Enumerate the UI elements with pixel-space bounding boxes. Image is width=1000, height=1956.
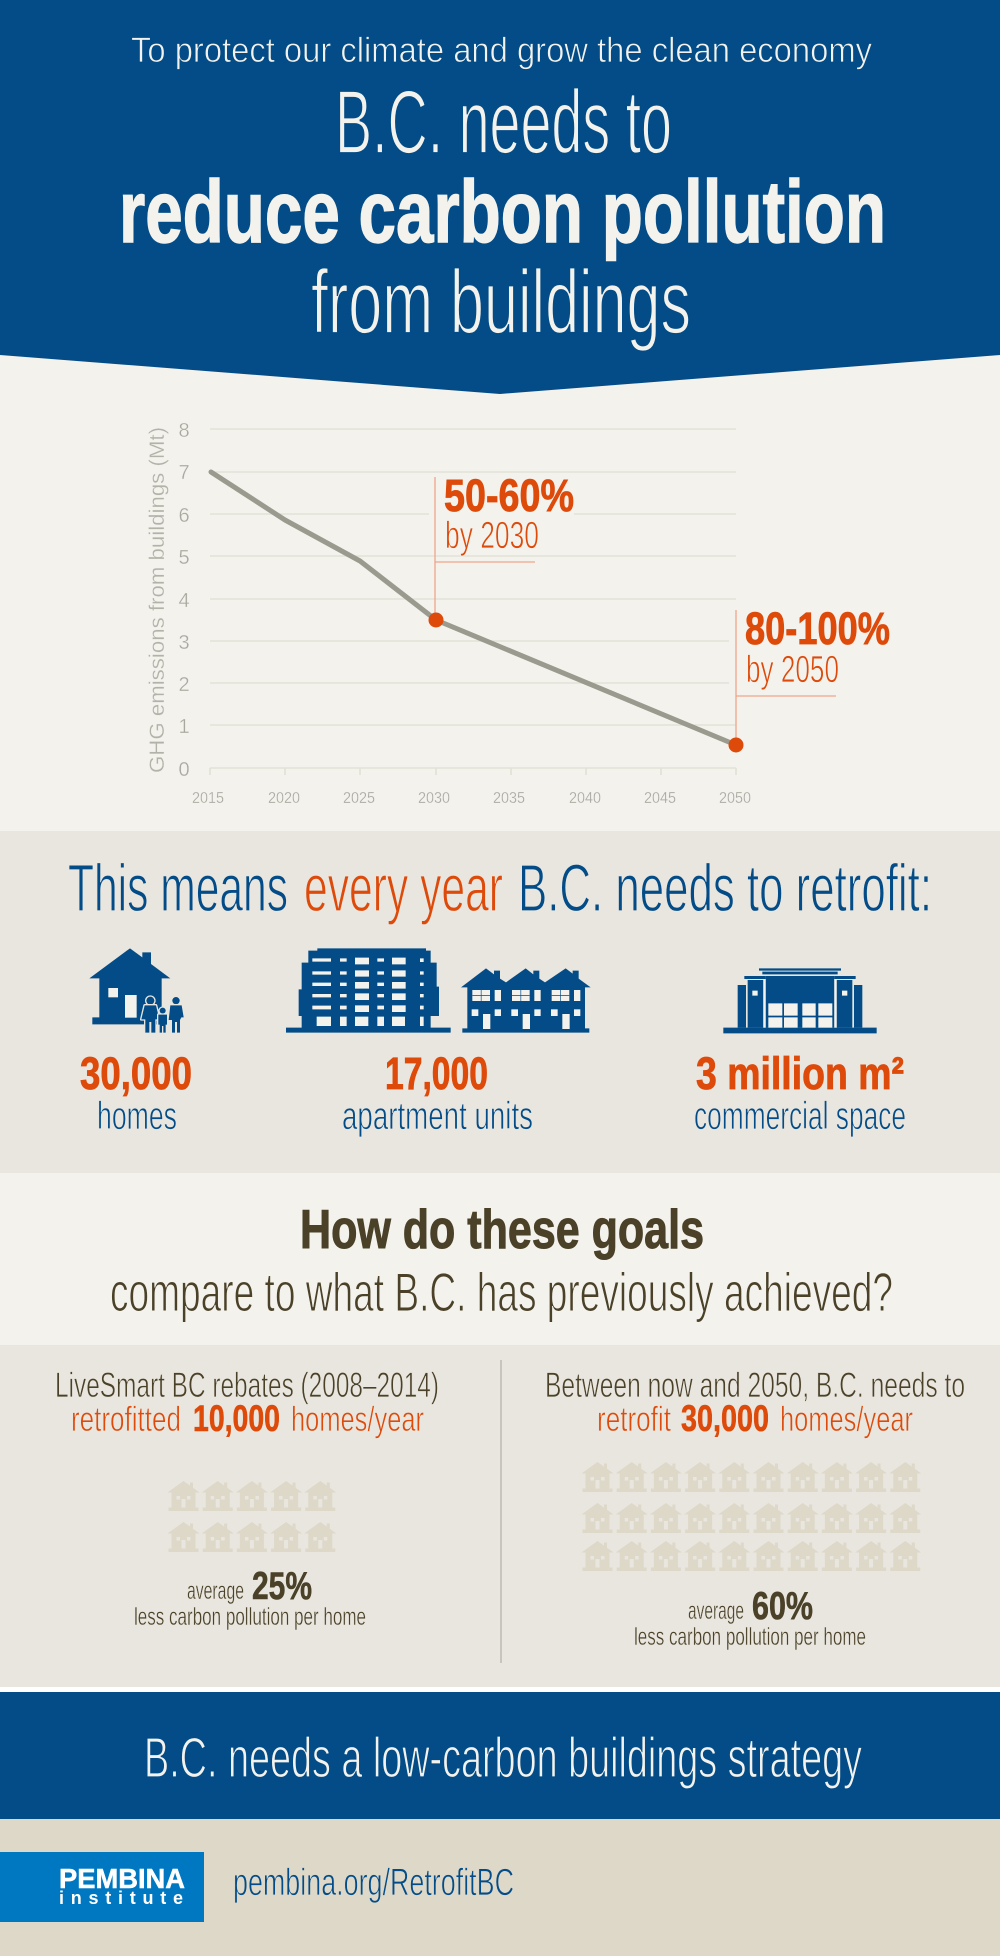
right column heading: 30,000 <box>681 1398 769 1439</box>
right column heading: homes/year <box>780 1400 913 1439</box>
line chart: GHG emissions from buildings <box>145 420 890 807</box>
x axis labels: 2020 <box>268 790 300 807</box>
header kicker: To protect our climate and grow the clean economy <box>131 31 872 70</box>
logo: Pembina Institute: PEMBINA <box>59 1863 185 1894</box>
y axis labels: 4 <box>178 590 190 612</box>
panel: every year retrofit targets <box>0 831 1000 1173</box>
callout 2050: by 2050 <box>746 649 839 691</box>
divider <box>500 1360 502 1663</box>
x axis labels: 2030 <box>418 790 450 807</box>
y axis labels: 8 <box>178 420 190 442</box>
url: pembina.org/RetrofitBC <box>233 1862 514 1904</box>
section heading: This means <box>68 851 288 926</box>
x axis labels: 2050 <box>719 790 751 807</box>
icon: house with family <box>89 948 184 1033</box>
x axis labels: 2025 <box>343 790 375 807</box>
callout 2050: 80-100% <box>745 603 890 654</box>
x axis labels: 2015 <box>192 790 224 807</box>
left stat: 25%: less carbon pollution per home <box>134 1603 366 1631</box>
right stat: 60%: less carbon pollution per home <box>634 1623 866 1651</box>
data point 2030 <box>428 612 444 628</box>
y axis labels: 3 <box>178 632 190 654</box>
y axis labels: 5 <box>178 547 190 569</box>
y axis title: GHG emissions from buildings (Mt) <box>145 427 169 773</box>
left stat: 25%: average <box>187 1577 244 1605</box>
stat: homes: homes <box>97 1095 177 1138</box>
left column heading: retrofitted <box>71 1400 181 1439</box>
title line 1: B.C. needs to <box>335 73 672 173</box>
left column heading: LiveSmart BC rebates (2008–2014) <box>55 1366 439 1405</box>
left stat: 25% <box>134 1565 366 1631</box>
stat: apartment units: apartment units <box>342 1095 533 1138</box>
section heading: every year <box>304 851 503 926</box>
callout 2030: by 2030 <box>445 515 539 557</box>
stat: commercial space: 3 million m² <box>696 1048 904 1099</box>
footer <box>0 1819 1000 1956</box>
right stat: 60%: 60% <box>752 1585 813 1628</box>
stat: commercial space <box>694 1048 906 1138</box>
logo: Pembina Institute: institute <box>59 1888 183 1908</box>
y axis labels: 0 <box>178 759 190 781</box>
callout 2050 <box>745 603 890 691</box>
right house pictogram: 30 homes <box>582 1462 921 1571</box>
left column heading: homes/year <box>291 1400 424 1439</box>
emissions line <box>211 472 736 745</box>
stat: homes: 30,000 <box>80 1048 192 1099</box>
stat: commercial space: commercial space <box>694 1095 906 1138</box>
right column heading <box>545 1366 965 1439</box>
townhouses <box>461 968 591 1033</box>
stat: homes <box>80 1048 192 1138</box>
callout leader lines <box>435 477 836 745</box>
logo: Pembina Institute <box>0 1852 204 1922</box>
left column heading: 10,000 <box>193 1398 280 1439</box>
heading: how do these goals compare: How do these goals <box>300 1198 704 1260</box>
x axis labels: 2035 <box>493 790 525 807</box>
y axis labels: 1 <box>178 716 190 738</box>
left house pictogram: 10 homes <box>168 1481 336 1552</box>
heading: how do these goals compare <box>110 1198 893 1323</box>
y axis labels: 7 <box>178 462 190 484</box>
x axis labels: 2040 <box>569 790 601 807</box>
stat: apartment units <box>342 1048 533 1138</box>
y axis labels: 6 <box>178 505 190 527</box>
right stat: 60% <box>634 1585 866 1651</box>
callout 2030 <box>444 470 574 557</box>
right stat: 60%: average <box>688 1597 744 1625</box>
panel: header <box>0 0 1000 394</box>
icon: commercial building <box>723 968 877 1033</box>
panel: comparison <box>0 1345 1000 1687</box>
left stat: 25%: 25% <box>252 1565 312 1608</box>
x axis labels: 2045 <box>644 790 676 807</box>
header chevron background <box>0 0 1000 394</box>
section heading <box>68 851 932 926</box>
stat: apartment units: 17,000 <box>385 1048 488 1099</box>
title line 3: from buildings <box>311 253 691 353</box>
left column heading <box>55 1366 439 1439</box>
right column heading: retrofit <box>597 1400 671 1439</box>
icon: apartment buildings <box>286 948 591 1033</box>
x axis labels <box>192 790 751 807</box>
white separator <box>0 1687 1000 1692</box>
data point 2050 <box>728 738 744 752</box>
apartment tower <box>286 948 451 1033</box>
callout 2030: 50-60% <box>444 470 574 521</box>
y axis labels <box>178 420 190 781</box>
banner: call to action <box>0 1692 1000 1819</box>
y axis labels: 2 <box>178 674 190 696</box>
